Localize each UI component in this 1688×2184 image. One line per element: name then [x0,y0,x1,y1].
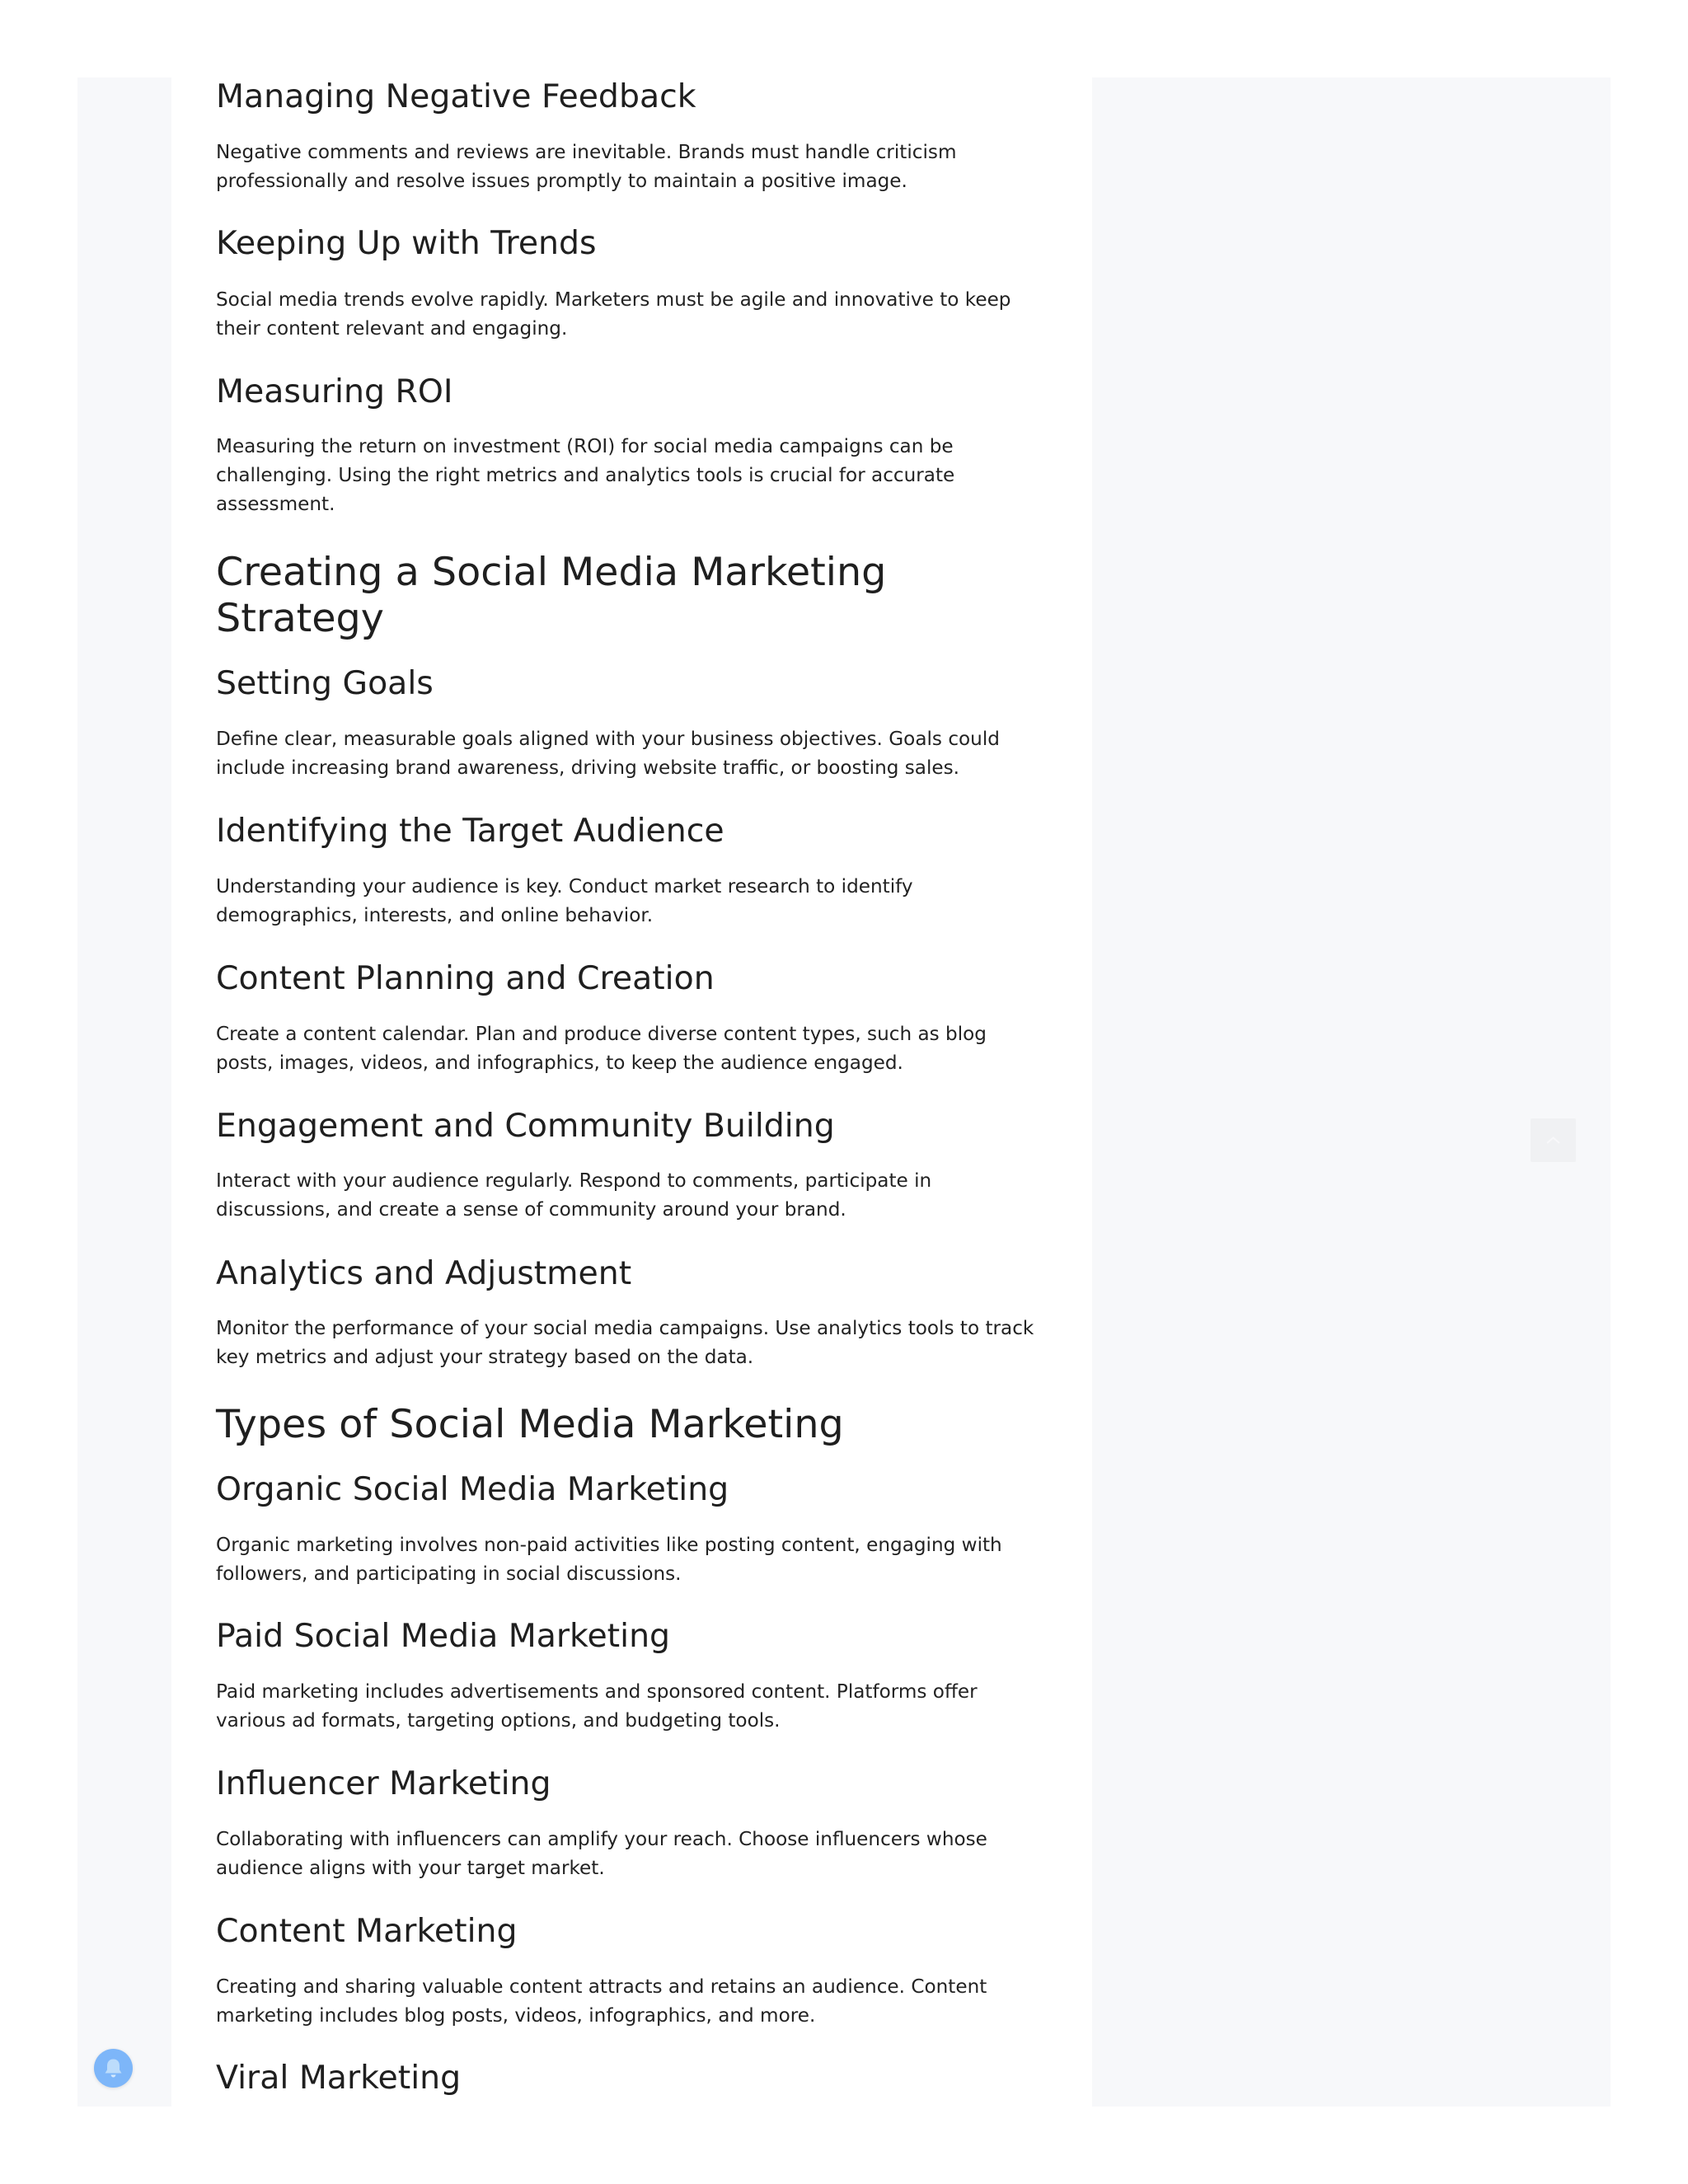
heading: Influencer Marketing: Influencer Marketing [216,1765,551,1802]
text: engagement: Interact with your audience regularly. Respond to comments, participate in [216,1170,931,1192]
heading: Content Marketing: Content Marketing [216,1912,518,1950]
text: audience [216,875,913,926]
heading: Content Planning and Creation: Content Planning and Creation [216,959,715,997]
text: ROI: Measuring the return on investment (ROI) for social media campaigns can be [216,435,954,457]
text: goals: Define clear, measurable goals aligned with your business objectives. Goals could [216,729,1000,750]
section heading: Creating a Social Media Marketing Strategy [216,549,886,641]
section heading: Creating a Social Media Marketing Strategy: Creating a Social Media Marketing [216,549,886,595]
heading: Measuring ROI: Measuring ROI [216,373,452,410]
text: negative feedback [216,142,957,192]
heading: Viral Marketing: Viral Marketing [216,2059,461,2097]
heading: Keeping Up with Trends: Keeping Up with Trends [216,224,597,262]
panel: right sidebar [1092,77,1611,2107]
text: influencer: audience aligns with your target market. [216,1858,605,1879]
heading: Setting Goals: Setting Goals [216,664,434,702]
text: trends: their content relevant and engaging. [216,318,567,340]
text: negative feedback: professionally and resolve issues promptly to maintain a positive image. [216,171,907,192]
text: content planning: posts, images, videos, and infographics, to keep the audience engaged. [216,1052,903,1073]
text: audience: demographics, interests, and online behavior. [216,905,653,926]
text: trends [216,289,1010,340]
text: trends: Social media trends evolve rapidly. Marketers must be agile and innovative to keep [216,289,1010,311]
heading: Identifying the Target Audience: Identifying the Target Audience [216,812,724,850]
text: analytics: key metrics and adjust your strategy based on the data. [216,1347,753,1368]
text: organic [216,1535,1002,1584]
text: analytics [216,1317,1034,1368]
text: paid: Paid marketing includes advertisements and sponsored content. Platforms offer [216,1681,978,1703]
text: audience: Understanding your audience is key. Conduct market research to identify [216,875,913,897]
text: negative feedback: Negative comments and reviews are inevitable. Brands must handle criticism [216,142,957,163]
heading: Managing Negative Feedback: Managing Negative Feedback [216,77,696,115]
icon: notification bell [94,2049,133,2088]
text: influencer [216,1828,987,1879]
text: paid: various ad formats, targeting options, and budgeting tools. [216,1709,781,1731]
text: content planning: Create a content calendar. Plan and produce diverse content types, such as blog [216,1024,987,1045]
text: content marketing [216,1976,987,2026]
text: ROI [216,435,954,514]
text: content marketing: marketing includes blog posts, videos, infographics, and more. [216,2004,815,2026]
button: back to top [1531,1118,1576,1162]
text: engagement [216,1170,931,1220]
text: influencer: Collaborating with influencers can amplify your reach. Choose influencers whose [216,1828,987,1849]
text: content planning [216,1024,987,1073]
section heading: Types of Social Media Marketing: Types of Social Media Marketing [216,1402,844,1447]
text: ROI: assessment. [216,493,335,514]
section heading: Creating a Social Media Marketing Strategy: Strategy [216,595,384,641]
text: organic: Organic marketing involves non-paid activities like posting content, engaging with [216,1535,1002,1556]
heading: Analytics and Adjustment: Analytics and Adjustment [216,1254,631,1292]
text: analytics: Monitor the performance of your social media campaigns. Use analytics tools to track [216,1317,1034,1338]
text: paid [216,1681,978,1731]
text: organic: followers, and participating in social discussions. [216,1563,682,1584]
heading: Paid Social Media Marketing: Paid Social Media Marketing [216,1617,670,1655]
text: ROI: challenging. Using the right metrics and analytics tools is crucial for accurate [216,465,954,486]
text: goals [216,729,1000,778]
heading: Organic Social Media Marketing: Organic Social Media Marketing [216,1470,729,1508]
text: content marketing: Creating and sharing valuable content attracts and retains an audience. Content [216,1976,987,1998]
text: engagement: discussions, and create a sense of community around your brand. [216,1198,846,1220]
panel: left sidebar [77,77,171,2107]
text: goals: include increasing brand awareness, driving website traffic, or boosting sales. [216,757,959,778]
heading: Engagement and Community Building: Engagement and Community Building [216,1106,835,1144]
